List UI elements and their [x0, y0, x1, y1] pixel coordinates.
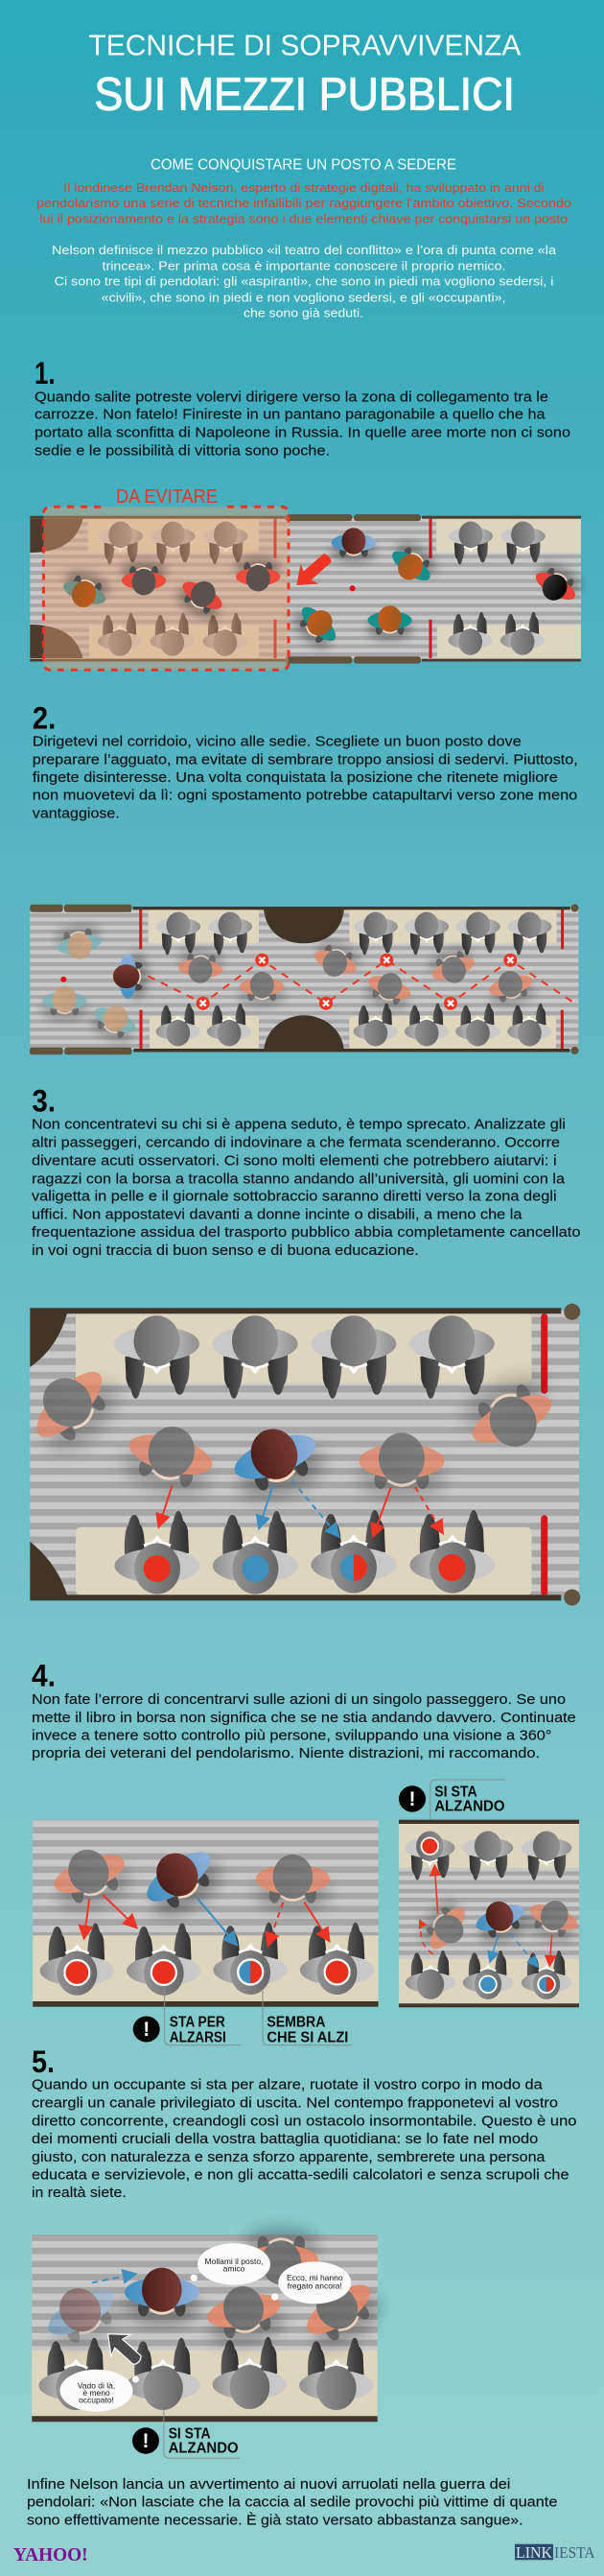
- step 2 text: vantaggiose.: [33, 807, 120, 822]
- step 3 text: valigetta in pelle e il giornale sottobraccio saranno diretti verso la zona degli: [32, 1190, 557, 1205]
- subtitle: COME CONQUISTARE UN POSTO A SEDERE: [151, 157, 456, 174]
- step 2 number: 2.: [33, 700, 56, 735]
- seated passengers: [40, 1923, 374, 1996]
- step 4 number: 4.: [32, 1658, 56, 1692]
- step 3 text: diventare acuti osservatori. Ci sono molti elementi che potrebbero aiutarvi: i: [32, 1153, 557, 1169]
- target markers: [422, 1838, 555, 1993]
- standing passengers: [35, 2226, 389, 2361]
- callout: sembra che si alzi: CHE SI ALZI: [267, 2029, 348, 2045]
- step 5 text: [32, 2078, 577, 2201]
- step 5 number: 5.: [32, 2044, 55, 2079]
- step 1 text: Quando salite potreste volervi dirigere verso la zona di collegamento tra le: [35, 390, 548, 405]
- dashed zigzag route: [148, 960, 574, 1004]
- callout: sta per alzarsi: ALZARSI: [170, 2029, 226, 2045]
- step 3 text: in voi ogni traccia di buon senso e di buona educazione.: [32, 1243, 419, 1259]
- title: [88, 28, 522, 120]
- step 1 text: portato alla sconfitta di Napoleone in Russia. In quelle aree morte non ci sono: [35, 425, 570, 440]
- seated passengers: [156, 912, 552, 1046]
- avoid zone: [43, 507, 289, 670]
- speech bubble: vado di la: occupato!: [79, 2395, 114, 2404]
- step 2 text: fingete disinteresse. Una volta conquistata la posizione che ritenete migliore: [33, 770, 558, 786]
- seated passengers: [38, 2337, 374, 2410]
- step 3 text: [32, 1118, 581, 1259]
- standing passengers: [45, 1834, 331, 1926]
- title: TECNICHE DI SOPRAVVIVENZA: [88, 28, 522, 61]
- callout: sta per alzarsi: [133, 1986, 241, 2045]
- step 4 text: Non fate l’errore di concentrarvi sulle azioni di un singolo passeggero. Se uno: [32, 1692, 566, 1708]
- white intro text: Ci sono tre tipi di pendolari: gli «aspiranti», che sono in piedi ma vogliono sedersi, i: [55, 274, 554, 289]
- standing passengers: [58, 528, 586, 654]
- step 2 text: preparare l’agguato, ma evitate di sembrare troppo ansiosi di sedervi. Piuttosto,: [33, 753, 578, 768]
- step 4 text: propria dei veterani del pendolarismo. Niente distrazioni, mi raccomando.: [32, 1746, 540, 1761]
- logo: linkiesta: LINK: [516, 2543, 553, 2562]
- white intro text: [52, 243, 557, 320]
- speech bubble: mollami: Mollami il posto,: [205, 2257, 263, 2266]
- speech bubble: ecco: fregato ancora!: [288, 2281, 342, 2291]
- closing text: sono effettivamente necessarie. È già stato versato abbastanza sangue».: [27, 2513, 523, 2529]
- step 1 number: 1.: [35, 356, 56, 390]
- callout: si sta alzando: SI STA: [434, 1784, 477, 1800]
- title: SUI MEZZI PUBBLICI: [94, 69, 515, 120]
- label: da evitare: DA EVITARE: [116, 486, 218, 508]
- step 3 text: uffici. Non appostatevi davanti a donne incinte o disabili, a meno che la: [32, 1207, 523, 1222]
- red intro text: Il londinese Brendan Nelson, esperto di strategie digitali, ha sviluppato in anni di: [63, 180, 545, 195]
- blocked spots: [197, 954, 517, 1010]
- observation arrows: [84, 1895, 329, 1946]
- red intro text: [36, 180, 571, 225]
- standing passengers: [18, 1353, 564, 1509]
- step 3 text: frequentazione assidua del trasporto pubblico abbia completamente cancellato: [32, 1225, 581, 1241]
- closing text: Infine Nelson lancia un avvertimento ai nuovi arruolati nella guerra dei: [27, 2477, 510, 2493]
- seated passengers: [98, 522, 546, 656]
- speech bubble: ecco: [271, 2261, 351, 2304]
- speech bubble: vado di la: Vado di là,: [78, 2380, 115, 2390]
- callout: si sta alzando: SI STA: [169, 2426, 211, 2443]
- speech bubble: mollami: amico: [223, 2264, 245, 2274]
- logo: linkiesta: IESTA: [554, 2543, 595, 2562]
- blue dashed move arrow: [92, 2274, 136, 2282]
- standing passengers: [41, 920, 538, 1049]
- seated passengers: [114, 1315, 495, 1595]
- speech bubble: vado di la: è meno: [82, 2388, 110, 2398]
- scene 3: observing seated passengers: [18, 1304, 580, 1606]
- callout: sta per alzarsi: !: [143, 2019, 150, 2041]
- step 2 text: non muovetevi da lì: ogni spostamento potrebbe catapultarvi verso zone meno: [33, 789, 577, 804]
- step 1 text: carrozze. Non fatelo! Finireste in un pantano paragonabile a quello che ha: [35, 408, 546, 423]
- callout: si sta alzando: !: [142, 2430, 150, 2452]
- standing passengers: [413, 1893, 584, 1959]
- step 5 text: creargli un canale privilegiato di uscita. Nel contempo frapponetevi al vostro: [32, 2096, 558, 2112]
- red intro text: pendolarismo una serie di tecniche infallibili per raggiungere l’ambito obiettivo. Secondo: [36, 196, 571, 210]
- callout: sembra che si alzi: SEMBRA: [267, 2015, 326, 2031]
- callout: si sta alzando: ALZANDO: [169, 2441, 239, 2457]
- speech bubble: mollami: [191, 2243, 270, 2285]
- scene 4: main panel: [33, 1820, 379, 2007]
- dark rotate arrow: [99, 2324, 149, 2373]
- speech bubble: vado di la: [59, 2370, 139, 2412]
- closing text: pendolari: «Non lasciate che la caccia al sedile provochi più vittime di quante: [27, 2495, 557, 2511]
- callout: sta per alzarsi: STA PER: [170, 2015, 225, 2031]
- step 4 text: [32, 1692, 576, 1761]
- observation arrows: [159, 1480, 443, 1537]
- step 5 text: Quando un occupante si sta per alzare, ruotate il vostro corpo in modo da: [32, 2078, 544, 2093]
- callout: si sta alzando: [399, 1780, 505, 1832]
- step 4 text: mette il libro in borsa non significa che se ne stia andando davvero. Continuate: [32, 1711, 576, 1726]
- step 3 text: altri passeggeri, cercando di indovinare a che fermata scenderanno. Occorre: [32, 1136, 560, 1151]
- step 5 text: dei momenti cruciali della vostra battaglia quotidiana: se lo fate nel modo: [32, 2132, 538, 2147]
- step 5 text: giusto, con naturalezza e senza sforzo apparente, sembrerete una persona: [32, 2150, 546, 2165]
- step 1 text: sedie e le possibilità di vittoria sono poche.: [35, 443, 330, 459]
- white intro text: che sono già seduti.: [244, 306, 363, 320]
- callout: si sta alzando: !: [408, 1788, 416, 1810]
- seated passengers: [405, 1832, 571, 1999]
- scene 2: corridor plan: [30, 904, 579, 1054]
- step 3 text: Non concentratevi su chi si è appena seduto, è tempo sprecato. Analizzate gli: [32, 1118, 566, 1133]
- white intro text: trincea». Per prima cosa è importante conoscere il proprio nemico.: [102, 259, 506, 273]
- white intro text: «civili», che sono in piedi e non vogliono sedersi, e gli «occupanti»,: [102, 290, 505, 304]
- step 2 text: [33, 735, 578, 822]
- arrow to avoid zone: [288, 547, 337, 595]
- scene 5: panel: [32, 2226, 389, 2422]
- step 2 text: Dirigetevi nel corridoio, vicino alle sedie. Scegliete un buon posto dove: [33, 735, 522, 750]
- logo: yahoo: YAHOO!: [13, 2544, 88, 2565]
- callout: si sta alzando: [132, 2410, 240, 2458]
- scene 1: carriage floor plan: [30, 507, 586, 670]
- movement arrows: [419, 1865, 552, 1967]
- step 1 text: [35, 390, 570, 459]
- scene 4: small panel: [399, 1820, 584, 2007]
- callout: si sta alzando: ALZANDO: [434, 1799, 505, 1815]
- step 4 text: invece a tenere sotto controllo più persone, sviluppando una visione a 360°: [32, 1728, 551, 1743]
- white intro text: Nelson definisce il mezzo pubblico «il teatro del conflitto» e l’ora di punta come «la: [52, 243, 557, 257]
- target markers: [144, 1554, 465, 1582]
- callout: sembra che si alzi: [263, 1991, 353, 2045]
- hero position marker: [60, 977, 66, 982]
- speech bubble: ecco: Ecco, mi hanno: [287, 2273, 343, 2282]
- logo: linkiesta: [515, 2543, 595, 2562]
- red intro text: lui il posizionamento e la strategia sono i due elementi chiave per conquistarsi un posto: [39, 211, 568, 225]
- step 5 text: diretto concorrente, creandogli così un ostacolo insormontabile. Questo è uno: [32, 2114, 577, 2129]
- step 5 text: educata e servizievole, e non gli accatta-sedili calcolatori e senza scrupoli che: [32, 2167, 569, 2183]
- hero position marker: [350, 585, 356, 591]
- step 3 text: ragazzi con la borsa a tracolla stanno andando all’università, gli uomini con la: [32, 1171, 566, 1187]
- step 3 number: 3.: [32, 1083, 56, 1118]
- target markers: [64, 1959, 350, 1985]
- closing text: [27, 2477, 557, 2529]
- step 5 text: in realtà siete.: [32, 2186, 127, 2201]
